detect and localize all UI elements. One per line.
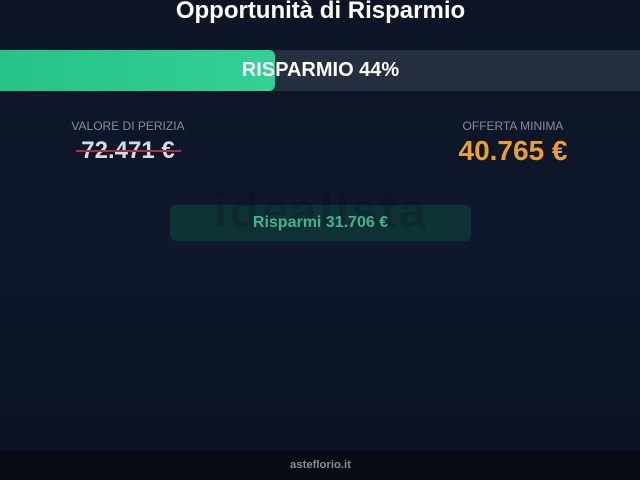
- footer text: asteflorio.it: [290, 459, 351, 471]
- label: offerta minima: OFFERTA MINIMA: [463, 119, 563, 133]
- value: 72.471 euro struck through: 72.471 €: [81, 137, 175, 164]
- footer bar: [0, 450, 640, 480]
- panel: offerta minima: [458, 119, 568, 166]
- bar fill: [0, 50, 275, 91]
- progress bar: risparmio 44%: [0, 50, 640, 91]
- panel: valore di perizia: [71, 119, 185, 164]
- watermark: idealista: idealista: [214, 185, 428, 238]
- strikethrough line: [76, 150, 181, 152]
- label: valore di perizia: VALORE DI PERIZIA: [71, 119, 185, 133]
- savings badge text: Risparmi 31.706 €: [253, 214, 388, 231]
- savings badge background: [170, 205, 471, 241]
- value: 40.765 euro: 40.765 €: [458, 135, 568, 166]
- bar label: RISPARMIO 44%: [242, 59, 399, 81]
